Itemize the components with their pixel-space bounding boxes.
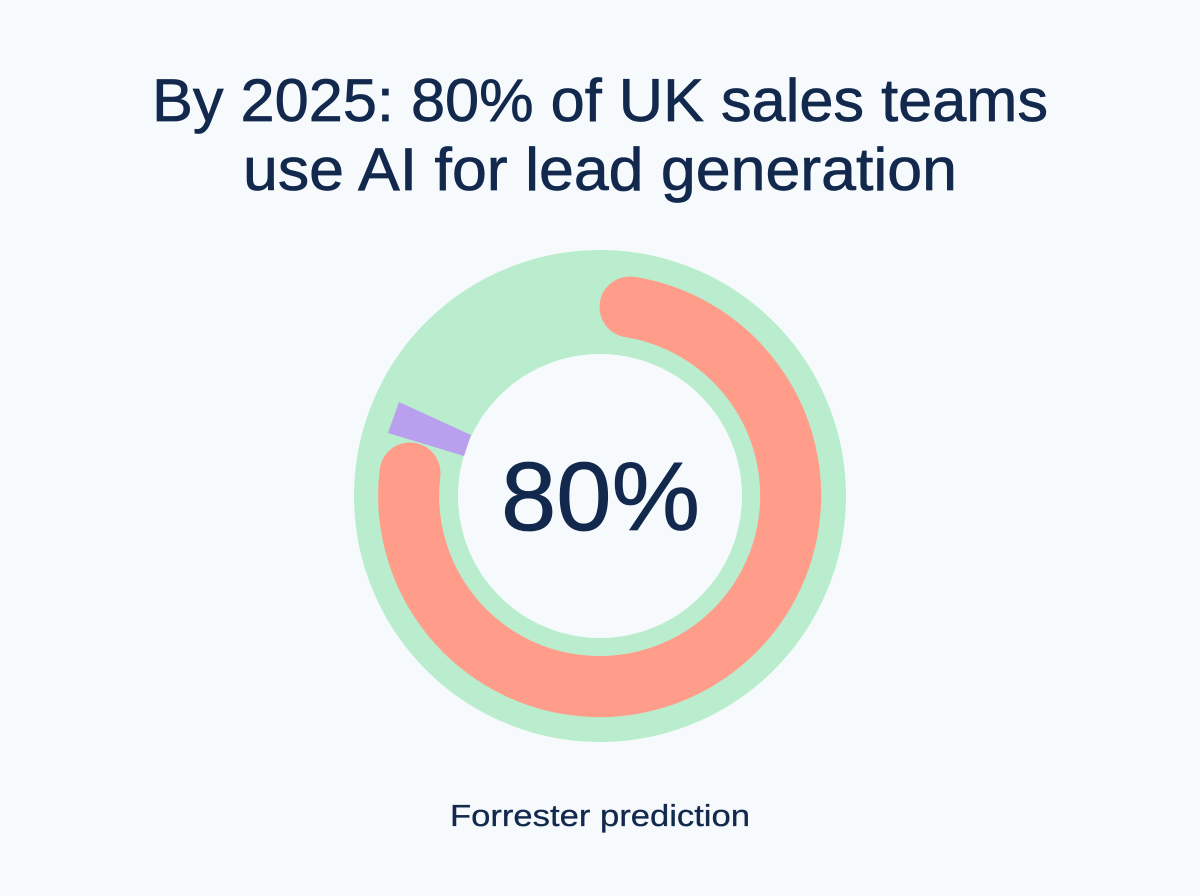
center value: 80%: [501, 442, 700, 551]
green ring: [406, 302, 794, 690]
purple segment: [388, 402, 471, 456]
red arc: [409, 307, 791, 687]
donut chart: [388, 302, 794, 690]
title: [152, 67, 1048, 203]
title: use AI for lead generation: [243, 136, 957, 203]
title: By 2025: 80% of UK sales teams: [152, 67, 1048, 134]
source caption: Forrester prediction: [450, 798, 750, 833]
